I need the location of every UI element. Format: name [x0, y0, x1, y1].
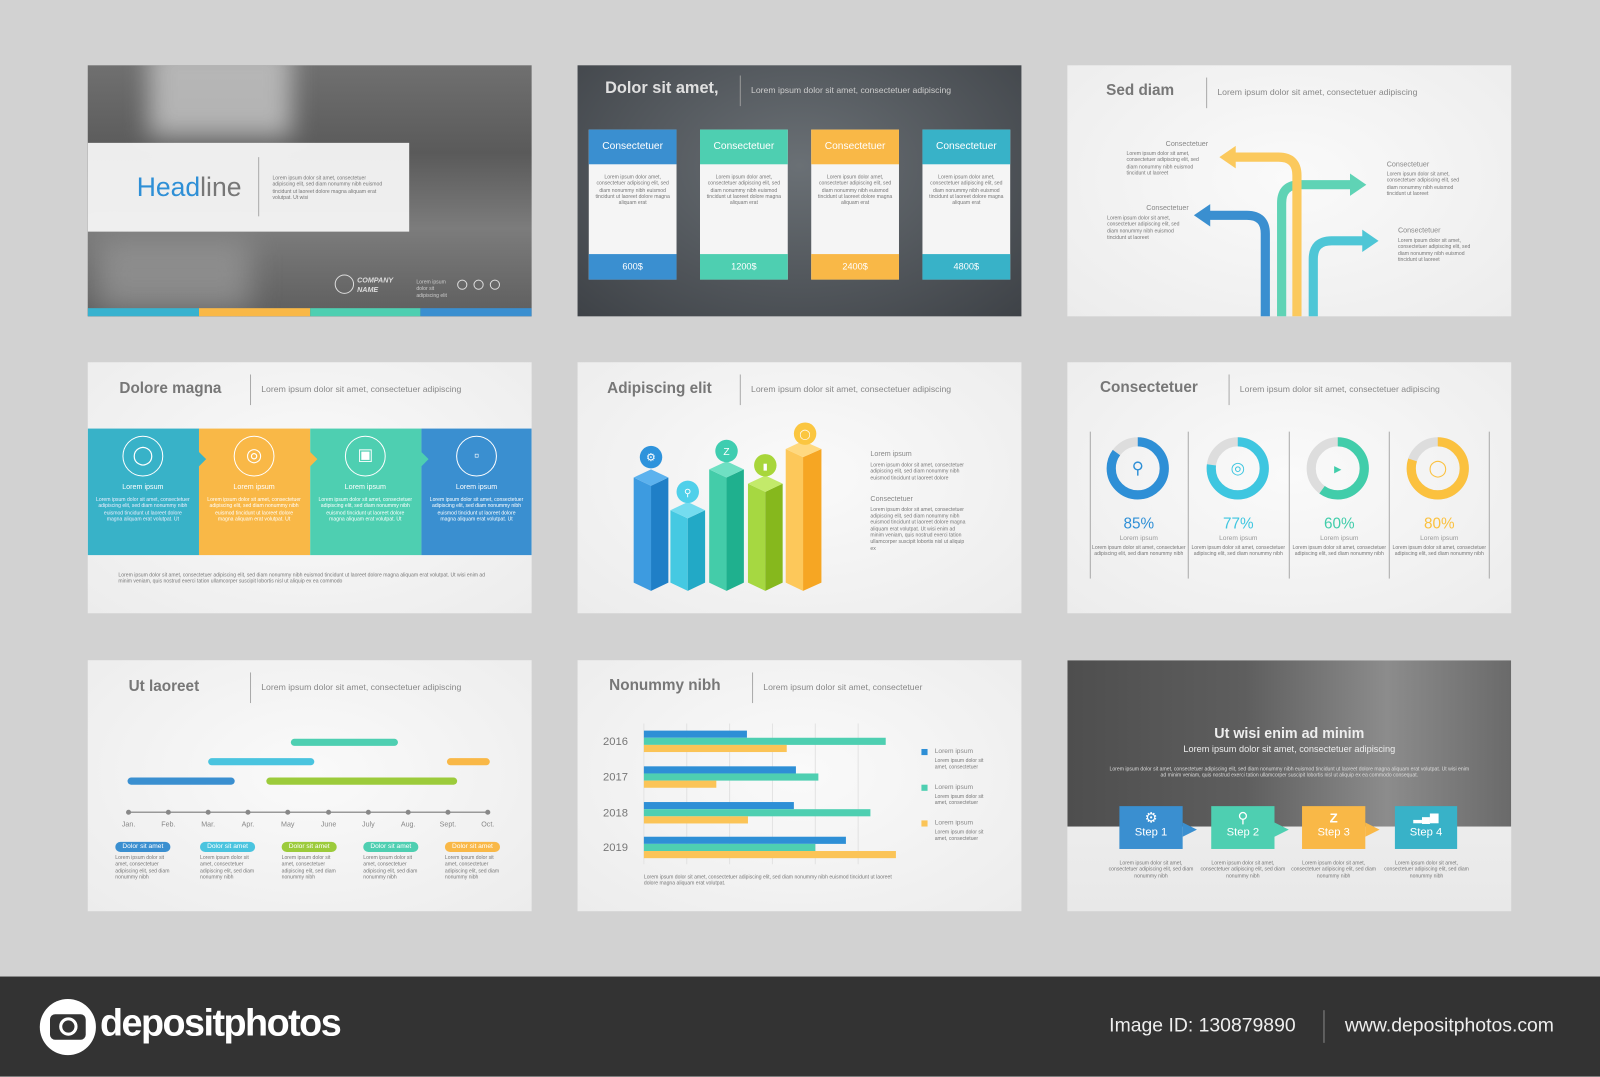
donuts: ⚲	[1132, 459, 1144, 477]
gantt chart: Jan.	[122, 821, 135, 829]
slide 9: steps over photo: Lorem ipsum dolor sit amet, consectetuer adipiscing elit, sed diam nonummy nibh	[1291, 860, 1376, 879]
legend: Lorem ipsum dolor sit amet, consectetuer	[935, 758, 983, 771]
milestone 1: Dolor sit amet	[122, 843, 163, 850]
image id: Image ID: 130879890	[1109, 1015, 1296, 1037]
company logo: COMPANY	[357, 278, 393, 285]
card 3: Consectetuer	[825, 141, 885, 152]
card 2: Lorem ipsum dolor amet, consectetuer adipiscing elit, sed diam nonummy nibh euismod tincidunt ut laoreet dolore magna aliquam erat	[707, 174, 781, 206]
donuts: ◯	[1429, 459, 1447, 477]
slide 2: pricing	[578, 65, 1021, 316]
company logo: NAME	[357, 287, 378, 294]
subtitle: Lorem ipsum dolor sit amet, consectetuer adipiscing	[261, 682, 461, 692]
3D bars: Z	[723, 447, 730, 458]
card 3: Lorem ipsum dolor amet, consectetuer adipiscing elit, sed diam nonummy nibh euismod tincidunt ut laoreet dolore magna aliquam erat	[818, 174, 892, 206]
step 3: Lorem ipsum	[345, 484, 386, 491]
donuts: ▸	[1334, 461, 1341, 477]
subtitle: Lorem ipsum dolor sit amet, consectetuer	[763, 682, 922, 692]
donuts	[1106, 437, 1469, 500]
footer bar	[0, 977, 1600, 1077]
bar chart: 2018	[603, 807, 628, 819]
subtitle: Lorem ipsum dolor sit amet, consectetuer adipiscing	[1217, 87, 1417, 97]
milestone 3: Lorem ipsum dolor sit amet, consectetuer adipiscing elit, sed diam nonummy nibh	[282, 855, 336, 881]
stat 77%: 77%	[1223, 515, 1254, 533]
milestone 3: Dolor sit amet	[289, 843, 330, 850]
milestone 3	[282, 842, 337, 881]
headline body text: Lorem ipsum dolor sit amet, consectetuer adipiscing elit, sed diam nonummy nibh euismod tincidunt ut laoreet dolore magna aliquam erat volutpat. Ut wisi	[272, 176, 382, 201]
bar chart: 2016	[603, 736, 628, 748]
step 2: ⚲	[1238, 809, 1248, 826]
card 1: 600$	[622, 261, 643, 271]
bar chart: 2019	[603, 842, 628, 854]
text: top right: Lorem ipsum dolor sit amet, consectetuer adipiscing elit, sed diam nonummy nibh euismod tincidunt ut laoreet	[1387, 171, 1459, 197]
step 1	[96, 436, 190, 522]
gantt chart	[122, 738, 494, 829]
step 4: Lorem ipsum dolor sit amet, consectetuer adipiscing elit, sed diam nonummy nibh euismod tincidunt ut laoreet dolore magna aliquam erat volutpat. Ut	[430, 497, 523, 522]
legend: Lorem ipsum dolor sit amet, consectetuer	[935, 794, 983, 806]
company logo: Lorem ipsum dolor sit adipiscing elit	[416, 280, 447, 299]
logo text: depositphotos	[100, 1002, 340, 1044]
legend: Lorem ipsum dolor sit amet, consectetuer	[935, 830, 983, 842]
step 2	[207, 436, 301, 522]
card 4: Consectetuer	[936, 141, 997, 152]
stat 80%: Lorem ipsum dolor sit amet, consectetuer adipiscing elit, sed diam nonummy nibh	[1392, 545, 1486, 557]
company logo	[334, 274, 500, 299]
card 2: Consectetuer	[714, 141, 774, 152]
3D bars	[634, 422, 822, 591]
step 3: Z	[1330, 810, 1338, 826]
text: mid left	[1107, 205, 1189, 241]
step 2: ◎	[246, 445, 262, 465]
step 4	[1395, 806, 1457, 849]
milestone 2: Dolor sit amet	[207, 843, 248, 850]
legend: Lorem ipsum	[935, 748, 973, 755]
gantt chart: Sept.	[440, 821, 456, 829]
stat 77%: Lorem ipsum dolor sit amet, consectetuer adipiscing elit, sed diam nonummy nibh	[1191, 545, 1285, 557]
right text: Lorem ipsum dolor sit amet, consectetuer adipiscing elit, sed diam nonummy nibh euismod tincidunt ut laoreet dolore	[870, 462, 964, 481]
card 1	[589, 130, 677, 280]
step 2: Lorem ipsum dolor sit amet, consectetuer adipiscing elit, sed diam nonummy nibh euismod tincidunt ut laoreet dolore magna aliquam erat volutpat. Ut	[207, 497, 301, 522]
step 2	[1211, 806, 1274, 849]
stat 60%: Lorem ipsum dolor sit amet, consectetuer adipiscing elit, sed diam nonummy nibh	[1292, 545, 1386, 557]
slide 5: 3D bar chart	[578, 362, 1021, 613]
gantt chart: July	[362, 821, 375, 829]
title: Adipiscing elit	[607, 380, 712, 397]
stat 80%: Lorem ipsum	[1420, 535, 1458, 542]
bar chart: 2017	[603, 772, 628, 784]
3D bars: ⚙	[646, 452, 656, 464]
bottom text: Lorem ipsum dolor sit amet, consectetuer adipiscing elit, sed diam nonummy nibh euismod tincidunt ut laoreet dolore magna aliquam erat volutpat. Ut wisi enim ad minim veniam, quis nostrud exerci tation ullamcorper suscipit lobortis nisl ut aliquip ex ea commodo	[118, 572, 485, 585]
milestone 4: Lorem ipsum dolor sit amet, consectetuer adipiscing elit, sed diam nonummy nibh	[363, 855, 417, 881]
slide 8: horizontal bar chart	[578, 660, 1021, 911]
milestone 1	[115, 842, 170, 881]
legend	[921, 748, 984, 842]
subtitle: Lorem ipsum dolor sit amet, consectetuer adipiscing	[1240, 384, 1440, 394]
heading: Ut wisi enim ad minim	[1214, 724, 1364, 741]
right text	[870, 450, 966, 552]
gantt chart: Apr.	[242, 821, 254, 829]
step 1: Lorem ipsum	[122, 484, 164, 491]
3D bars: ◯	[799, 430, 811, 441]
subtitle: Lorem ipsum dolor sit amet, consectetuer adipiscing	[261, 384, 461, 394]
text: top right: Consectetuer	[1387, 161, 1429, 168]
milestone 2	[200, 842, 256, 881]
headline panel	[88, 143, 409, 232]
step 2: Step 2	[1227, 827, 1259, 839]
text: top left: Consectetuer	[1166, 141, 1208, 148]
step 3: Step 3	[1317, 827, 1350, 839]
step 4: ▂▄▆	[1413, 811, 1439, 823]
arrows diagram	[1194, 146, 1378, 316]
headline text: Headline	[137, 171, 241, 202]
gantt chart: Aug.	[401, 821, 416, 829]
stat 77%	[1191, 515, 1285, 557]
stat 80%	[1392, 515, 1486, 557]
step 3	[1302, 806, 1365, 849]
donuts: ◎	[1231, 459, 1245, 477]
step 2: Lorem ipsum	[233, 484, 275, 491]
color stripe	[88, 308, 532, 316]
photo street	[98, 239, 251, 310]
title: Sed diam	[1106, 82, 1174, 99]
title: Nonummy nibh	[609, 677, 721, 694]
stat 80%: 80%	[1424, 515, 1455, 533]
subtitle: Lorem ipsum dolor sit amet, consectetuer adipiscing	[751, 85, 951, 95]
step 1: Lorem ipsum dolor sit amet, consectetuer adipiscing elit, sed diam nonummy nibh euismod tincidunt ut laoreet dolore magna aliquam erat volutpat. Ut	[96, 497, 190, 522]
website: www.depositphotos.com	[1345, 1015, 1554, 1037]
step captions: Lorem ipsum dolor sit amet, consectetuer adipiscing elit, sed diam nonummy nibh	[1109, 860, 1193, 879]
bar chart	[603, 724, 896, 864]
stat 85%: 85%	[1123, 515, 1154, 533]
title: Dolor sit amet,	[605, 80, 719, 97]
slide 9: steps over photo: Lorem ipsum dolor sit amet, consectetuer adipiscing elit, sed diam nonummy nibh	[1200, 860, 1285, 879]
stat 60%: 60%	[1324, 515, 1355, 533]
right text: Lorem ipsum	[870, 451, 912, 458]
body text: Lorem ipsum dolor sit amet, consectetuer adipiscing elit, sed diam nonummy nibh euismod tincidunt ut laoreet dolore magna aliquam erat volutpat. Ut wisi enim ad minim veniam, quis nostrud exerci tation ullamcorper suscipit lobortis nisl ut aliquip ex ea commodo consequat.	[1109, 766, 1469, 779]
card 3	[811, 130, 899, 280]
legend: Lorem ipsum	[935, 819, 973, 827]
gantt chart: May	[281, 821, 295, 829]
3D bars: ▮	[763, 461, 768, 471]
logo icon	[40, 999, 96, 1055]
milestone 2: Lorem ipsum dolor sit amet, consectetuer adipiscing elit, sed diam nonummy nibh	[200, 855, 254, 881]
step 1: Step 1	[1135, 827, 1167, 839]
stat 60%	[1292, 515, 1386, 557]
milestone 4	[363, 842, 418, 881]
slide 9: steps over photo: Lorem ipsum dolor sit amet, consectetuer adipiscing elit, sed diam nonummy nibh	[1384, 860, 1469, 879]
gantt chart: Mar.	[201, 821, 215, 829]
step 3	[318, 436, 412, 522]
step 4: Lorem ipsum	[456, 484, 497, 491]
slide 9: steps over photo	[1067, 660, 1511, 911]
milestone 5: Dolor sit amet	[452, 843, 493, 850]
text: mid left: Lorem ipsum dolor sit amet, consectetuer adipiscing elit, sed diam nonummy nibh euismod tincidunt ut laoreet	[1107, 215, 1179, 241]
text: mid left: Consectetuer	[1146, 205, 1189, 212]
steps	[1182, 822, 1380, 837]
subheading: Lorem ipsum dolor sit amet, consectetuer adipiscing	[1183, 744, 1395, 754]
stat 85%: Lorem ipsum dolor sit amet, consectetuer adipiscing elit, sed diam nonummy nibh	[1092, 545, 1186, 557]
slide 4: process band	[88, 362, 532, 613]
slide 6: donut percentages	[1067, 362, 1511, 613]
milestone 1: Lorem ipsum dolor sit amet, consectetuer adipiscing elit, sed diam nonummy nibh	[115, 855, 169, 881]
subtitle: Lorem ipsum dolor sit amet, consectetuer adipiscing	[751, 384, 951, 394]
gantt chart: June	[321, 821, 336, 829]
chart caption: Lorem ipsum dolor sit amet, consectetuer adipiscing elit, sed diam nonummy nibh euismod tincidunt ut laoreet dolore magna aliquam erat volutpat.	[644, 874, 892, 887]
stat 85%	[1092, 515, 1186, 557]
step 1	[1119, 806, 1183, 849]
milestone 5	[444, 842, 500, 881]
stat 60%: Lorem ipsum	[1320, 535, 1358, 542]
photo header	[1067, 660, 1511, 827]
colored band	[88, 428, 532, 556]
stat 85%: Lorem ipsum	[1120, 535, 1158, 542]
step 1: ◯	[133, 445, 153, 465]
step 4: ▫	[474, 447, 479, 463]
legend: Lorem ipsum	[935, 784, 973, 791]
title: Dolore magna	[119, 380, 221, 397]
text: top left: Lorem ipsum dolor sit amet, consectetuer adipiscing elit, sed diam nonummy nibh euismod tincidunt ut laoreet	[1127, 151, 1199, 176]
step 3: Lorem ipsum dolor sit amet, consectetuer adipiscing elit, sed diam nonummy nibh euismod tincidunt ut laoreet dolore magna aliquam erat volutpat. Ut	[319, 497, 412, 522]
card 3: 2400$	[842, 261, 868, 271]
title: Consectetuer	[1100, 379, 1198, 396]
text: bottom right: Lorem ipsum dolor sit amet, consectetuer adipiscing elit, sed diam nonummy nibh euismod tincidunt ut laoreet	[1398, 238, 1470, 263]
step 4	[430, 436, 524, 522]
slide 3: arrows	[1067, 65, 1511, 316]
photo sky	[149, 45, 292, 137]
right text: Consectetuer	[870, 496, 913, 503]
card 2: 1200$	[731, 261, 757, 271]
card 1: Consectetuer	[602, 141, 663, 152]
card 4: 4800$	[954, 261, 979, 271]
card 1: Lorem ipsum dolor amet, consectetuer adipiscing elit, sed diam nonummy nibh euismod tincidunt ut laoreet dolore magna aliquam erat	[595, 174, 670, 206]
3D bars: ⚲	[684, 488, 691, 499]
text: top left	[1126, 141, 1208, 176]
right text: Lorem ipsum dolor sit amet, consectetuer adipiscing elit, sed diam nonummy nibh euismod tincidunt ut laoreet dolore magna aliquam erat volutpat. Ut wisi enim ad minim veniam, quis nostrud exerci tation ullamcorper suscipit lobortis nisl ut aliquip ex	[870, 507, 965, 552]
card 4: Lorem ipsum dolor amet, consectetuer adipiscing elit, sed diam nonummy nibh euismod tincidunt ut laoreet dolore magna aliquam erat	[929, 174, 1003, 206]
text: bottom right: Consectetuer	[1398, 228, 1440, 235]
gantt chart: Feb.	[161, 821, 176, 829]
step 3: ▣	[358, 447, 373, 464]
slide 1: headline	[88, 65, 532, 316]
stat 77%: Lorem ipsum	[1219, 535, 1257, 542]
card 4	[922, 130, 1010, 280]
step 1: ⚙	[1145, 809, 1157, 826]
milestone 5: Lorem ipsum dolor sit amet, consectetuer adipiscing elit, sed diam nonummy nibh	[445, 855, 499, 881]
milestone 4: Dolor sit amet	[370, 843, 411, 850]
gantt chart: Oct.	[481, 821, 494, 829]
card 2	[700, 130, 788, 280]
step 4: Step 4	[1410, 827, 1442, 839]
title: Ut laoreet	[129, 678, 199, 695]
slide 7: timeline gantt	[88, 660, 532, 911]
